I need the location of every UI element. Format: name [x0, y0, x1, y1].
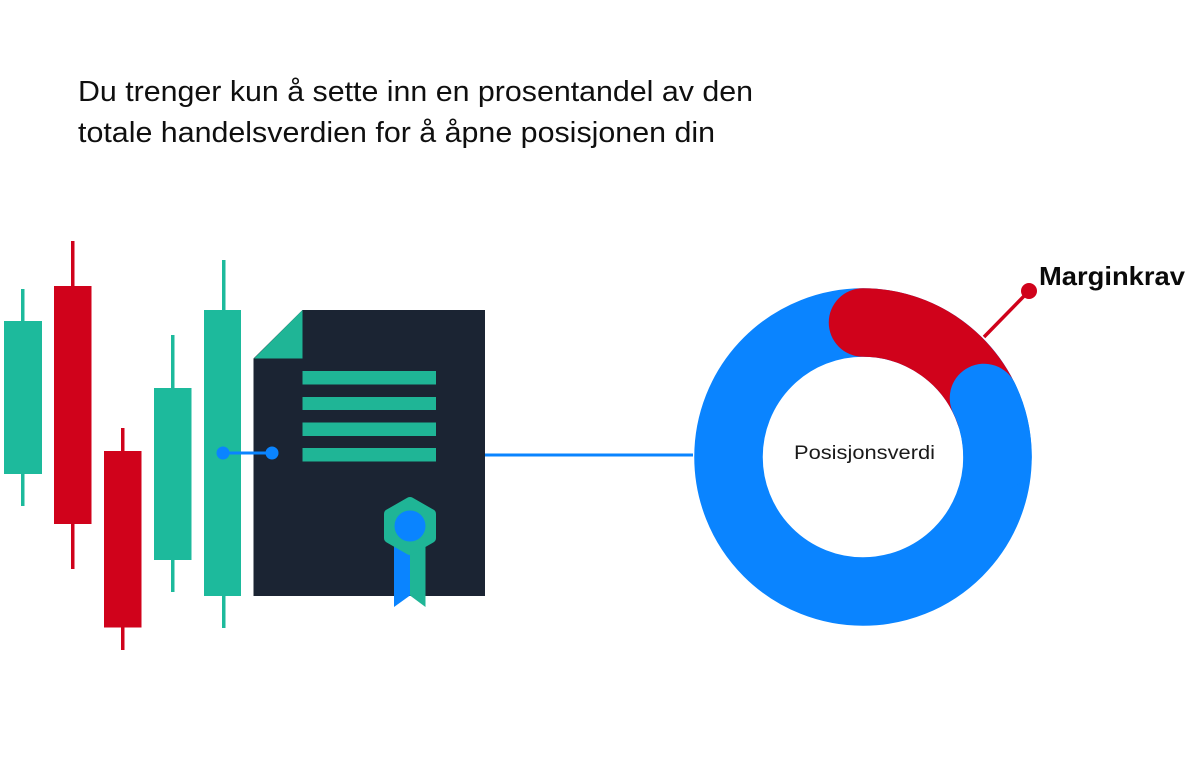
candle 2: [54, 241, 92, 569]
position value cap: [984, 398, 998, 457]
margin callout: Marginkrav: [1039, 261, 1186, 291]
document sheet: [254, 310, 485, 596]
position value ring: [728, 322, 998, 592]
candlestick chart: [4, 241, 241, 650]
title: Du trenger kun å sette inn en prosentandel av den: [78, 76, 753, 108]
document: [254, 310, 485, 607]
connector: candle to document: [216, 446, 278, 460]
candle 1: [4, 289, 42, 506]
donut chart: [728, 322, 998, 592]
donut centre label: Posisjonsverdi: [794, 443, 935, 464]
text lines: [302, 371, 436, 462]
page fold: [254, 310, 302, 358]
title: [78, 76, 753, 149]
candle 3: [104, 428, 142, 650]
margin callout: [984, 261, 1186, 337]
icon: rosette seal: [389, 502, 431, 607]
title: totale handelsverdien for å åpne posisjonen din: [78, 117, 715, 149]
candle 4: [154, 335, 192, 592]
candle 5: [204, 260, 241, 628]
connector: document to donut: [485, 454, 693, 456]
margin segment: [863, 322, 990, 413]
